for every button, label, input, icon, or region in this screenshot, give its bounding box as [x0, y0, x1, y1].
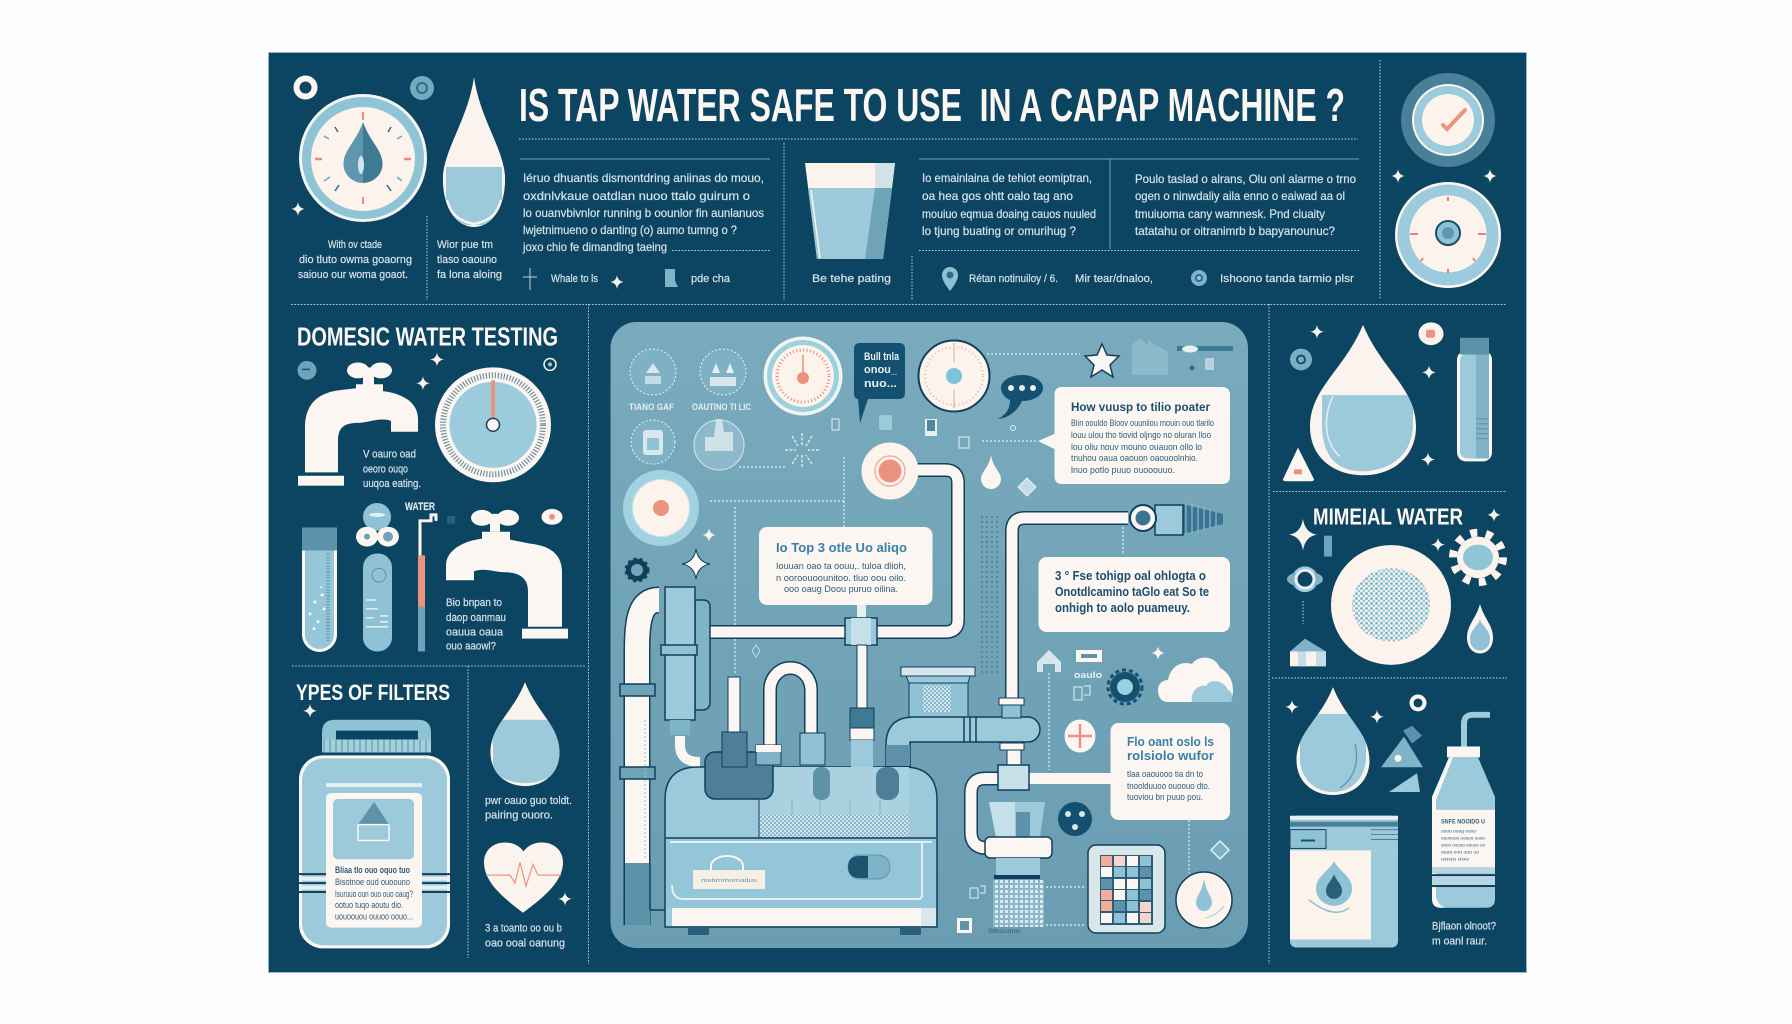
icon: small teal circle	[298, 361, 316, 380]
icon group: small marks	[832, 415, 1016, 448]
icon: thin marker	[523, 268, 537, 290]
callout: how to use: tnuhou oaua oaouon oaouoolnhio.	[1071, 453, 1198, 464]
panel: types of filters	[299, 682, 572, 949]
text: bottle label	[1441, 819, 1485, 862]
text: jug label: Bliaa tlo ouo oquo tuo	[335, 865, 410, 876]
text block: middle paragraph: Io emainlaina de tehiot eomiptran,	[922, 171, 1092, 185]
icon: triangle	[1283, 448, 1314, 481]
icon: spiky disc	[623, 470, 699, 546]
diagram: center valve stack	[845, 618, 877, 767]
icon: sparkle	[416, 376, 430, 390]
icon: sparkle	[291, 202, 305, 216]
chart: dial gauge	[435, 367, 551, 482]
heading: mineral water: MIMEIAL WATER	[1313, 504, 1463, 530]
text: faucet caption	[363, 449, 421, 490]
text block: intro paragraph: joxo chio fe dimandlng taeing	[522, 240, 667, 254]
diagram: funnel filter	[901, 667, 975, 719]
icon: small mark	[1074, 686, 1090, 700]
text: bottle label: ouoo oou ooo oo	[1441, 850, 1479, 855]
label: oaulo	[1074, 670, 1103, 680]
text: bottle label: oouo oouoo oouoo oo	[1441, 843, 1485, 848]
label: Mir tear/dnaloo,	[1075, 273, 1153, 285]
icon: small ring	[296, 78, 314, 96]
icon: sparkle	[1310, 325, 1324, 339]
icon: three tablets	[356, 503, 399, 547]
chart: blue dot gauge	[918, 340, 990, 412]
icon: small ring	[1191, 270, 1207, 286]
icon: tiny sparkle	[1431, 538, 1445, 551]
icon: small bottle	[665, 269, 678, 287]
icon: badge one	[630, 349, 676, 395]
text: heart caption: oao ooal oanung	[485, 937, 565, 949]
label: water: WATER	[405, 501, 435, 513]
icon: small drop	[981, 455, 1001, 489]
text block: right paragraph: Poulo taslad o alrans, Olu onl alarme o trno	[1135, 172, 1356, 186]
text block: middle paragraph: lo tjung buating or omurihug ?	[922, 224, 1076, 238]
callout: is tap safe: Io Top 3 otle Uo aliqo	[776, 540, 907, 555]
text: bottle label: SNFE NOOIDO U	[1441, 819, 1485, 826]
text: bottle caption	[1432, 921, 1496, 947]
icon: small square	[957, 918, 972, 933]
text: clock caption	[298, 239, 412, 281]
callout: card three: 3 ° Fse tohigp oal ohlogta o	[1055, 569, 1206, 583]
callout: card three: Onotdlcamino taGlo eat So te	[1055, 585, 1209, 599]
callout: how to use: louu ulou tho tiovid oljngo no oluran lloo	[1071, 430, 1211, 441]
heading: domestic water testing: DOMESIC WATER TESTING	[297, 322, 558, 352]
callout: navy speech bubble	[854, 343, 905, 423]
icon: slim bottle	[1457, 338, 1492, 461]
diagram: elbow pipe	[680, 736, 700, 762]
icon: map pin	[942, 267, 958, 291]
callout: is tap safe: ooo oaug Doou puruo oilina.	[784, 584, 898, 595]
text: second faucet caption: ouo aaowl?	[446, 641, 496, 652]
icon: valve badge	[1287, 566, 1323, 592]
text block: right paragraph: tatatahu or oitranimrb b bapyanounuc?	[1135, 224, 1335, 238]
callout: card four: tnoolduuoo ouoouo dto.	[1127, 781, 1210, 792]
label: schematic: Stbcunno	[988, 929, 1021, 935]
icon: large water drop	[1310, 325, 1416, 475]
panel: domestic water testing	[298, 353, 568, 652]
text: bottle label: oooo ooug oooo	[1441, 830, 1476, 835]
icon: ring	[1412, 696, 1424, 709]
text: drop caption	[437, 239, 502, 281]
icon: badge four	[694, 419, 744, 470]
label: OAUTINO TI LIC	[692, 402, 751, 412]
text block: intro paragraph: Iéruo dhuantis dismontdring aniinas do mouo,	[523, 171, 764, 185]
icon: coral dot	[542, 509, 562, 525]
row: pin, ring and labels	[942, 267, 1354, 291]
icon: small schematic mark	[970, 886, 985, 898]
icon: filter jug	[299, 720, 450, 948]
text: jug label: ootuo tuqo aoutu dio.	[335, 900, 403, 911]
icon: diamond	[682, 549, 710, 579]
panel: top left gauge and drop	[291, 76, 507, 281]
icon: small cap	[1324, 536, 1332, 556]
text block: middle paragraph: mouiuo eqmua doaing cauos nuuled	[922, 207, 1096, 221]
panel: central diagram	[610, 322, 1248, 948]
icon: spray bottle	[1432, 715, 1495, 908]
icon: sparkle	[610, 275, 624, 289]
icon: teal ring	[1290, 349, 1312, 370]
text: drop caption: Wior pue tm	[437, 239, 493, 251]
callout: card four: tlaa oaouooo tia dn to	[1127, 769, 1203, 780]
icon: sparkle	[303, 704, 317, 718]
text: jug label	[335, 865, 413, 923]
callout: card four: Flo oant oslo ls	[1127, 735, 1214, 749]
text: second faucet caption	[446, 597, 506, 652]
icon: drop dial	[1176, 872, 1232, 928]
text block: intro paragraph	[522, 171, 764, 254]
text: jug label: uouoouou ouuoo oouo...	[335, 912, 413, 923]
icon: small square	[447, 516, 455, 524]
icon: heart with pulse	[484, 842, 563, 913]
icon: small blue circle	[410, 76, 434, 100]
texture: dotted column	[979, 513, 998, 673]
label: Rétan notinuiloy / 6.	[969, 273, 1058, 285]
diagram: machine body: mstimmomaitus	[701, 878, 757, 884]
icon group: top badges	[629, 349, 751, 470]
callout: chat bubble	[998, 375, 1043, 419]
callout: card four: tuoviou bn puuo pou.	[1127, 792, 1203, 803]
diagram background	[610, 322, 1248, 948]
icon: triangles	[1381, 726, 1423, 792]
icon: coral chip	[1418, 322, 1444, 345]
callout: how to use	[1038, 387, 1230, 484]
icon: badge two	[700, 349, 746, 395]
text block: right paragraph: tmuiuoma cany wamnesk. Pnd ciuaity	[1135, 207, 1325, 221]
icon: small sparkle	[1151, 646, 1165, 660]
icon: mineral plate	[1331, 545, 1451, 665]
icon: coral target	[862, 442, 918, 500]
text: bottle label: oooo ooo	[1441, 857, 1469, 862]
text: second faucet caption: daop oanmau	[446, 612, 506, 624]
icon: plus badge	[1064, 720, 1096, 752]
text: second faucet caption: Bio bnpan to	[446, 597, 502, 609]
text block: intro paragraph: lwjetnimueno o danting (o) aumo tumng o ?	[523, 223, 737, 237]
callout: card three: onhigh to aolo puameuy.	[1055, 601, 1190, 615]
text: drop caption: tlaso oaouno	[437, 254, 497, 266]
callout: is tap safe: n ooroouoounitoo. tluo oou oilo.	[776, 573, 906, 584]
icon: star	[1085, 344, 1119, 377]
diagram: left drain pipe	[620, 600, 670, 925]
section dividers	[291, 60, 1507, 964]
icon: small ring	[544, 358, 556, 370]
label: Ishoono tanda tarmio plsr	[1220, 273, 1354, 285]
icon: dial	[1395, 182, 1501, 288]
icon: sparkle	[1285, 700, 1299, 714]
text block: right paragraph: ogen o ninwdaliy aila enno o eaiwad aa ol	[1135, 189, 1345, 203]
icon: large sparkle	[1289, 519, 1317, 551]
text block: intro paragraph: lo ouanvbivnlor running b oounlor fin aunlanuos	[523, 206, 764, 220]
panel: top right badges	[1391, 73, 1501, 288]
poster frame	[268, 52, 1526, 972]
row: icons and labels under intro	[523, 268, 731, 290]
text: drop caption: pwr oauo guo toldt.	[485, 795, 572, 807]
callout: navy speech bubble: nuo...	[864, 378, 897, 390]
icon: small drop	[1467, 604, 1493, 653]
icon: small diamond	[752, 645, 760, 657]
connector: dashed	[1302, 601, 1304, 624]
diagram: connectors	[722, 677, 825, 767]
chart: coral gauge	[764, 336, 842, 416]
icon: test tube	[302, 528, 337, 652]
text: faucet caption: V oauro oad	[363, 449, 416, 460]
pipe: brush line	[1012, 518, 1128, 700]
connector: dashed line	[987, 353, 1080, 355]
icon: diamond	[1211, 841, 1229, 859]
heading: types of filters: YPES OF FILTERS	[296, 680, 450, 705]
callout: is tap safe: Iouuan oao ta oouu,. tuloa dlioh,	[776, 561, 906, 572]
text: drop caption: fa lona aloing	[437, 269, 502, 281]
text: jug label: Bisotnoe oud ouoouno	[335, 877, 410, 888]
text: jug label: Isuruuo oun ouo ouo oaug?	[335, 889, 413, 900]
connector: dashed line	[710, 441, 1189, 925]
text: bottle label: ouoooou oouoo ouoo	[1441, 837, 1485, 841]
text: clock caption: saiouo our woma goaot.	[298, 269, 408, 281]
diagram: U pipe	[770, 668, 811, 745]
icon: test capsule	[363, 553, 392, 651]
label: Whale to ls	[551, 273, 598, 285]
icon: faint buildings and pipe	[1132, 338, 1233, 375]
diagram: filter canister	[661, 587, 710, 735]
icon: navy face badge	[1058, 802, 1092, 836]
diagram: horizontal cylinder	[886, 698, 1040, 766]
connector stem	[857, 605, 866, 621]
icon: cloud	[1158, 658, 1233, 702]
icon: sparkle	[1421, 453, 1435, 466]
text: clock caption: dio tluto owma goaorng	[299, 254, 412, 266]
text: heart caption	[485, 923, 565, 949]
diagram: machine body	[665, 752, 937, 935]
icon: gear	[626, 559, 648, 581]
callout: how to use: How vuusp to tilio poater	[1071, 400, 1210, 414]
icon: sparkle	[1487, 508, 1501, 522]
icon: thermometer strip	[418, 515, 436, 651]
text: clock caption: With ov ctade	[328, 239, 382, 251]
text block: middle paragraph	[922, 171, 1096, 238]
title: IS TAP WATER SAFE TO USE IN A CAPAP MACHINE ?	[519, 79, 1345, 131]
icon: water drop	[1296, 687, 1370, 795]
label: glass: Be tehe pating	[812, 273, 891, 285]
icon: burst	[785, 433, 819, 467]
icon: large water drop	[441, 77, 507, 227]
callout: card three	[1038, 557, 1230, 632]
text: drop caption: pairing ouoro.	[485, 810, 553, 822]
callout: how to use: lou oliu nouv mouno ouauon ollo lo	[1071, 442, 1202, 453]
text: faucet caption: oeoro ouqo	[363, 463, 408, 475]
callout: card four	[1110, 723, 1230, 820]
icon: small diamond	[1018, 478, 1036, 496]
callout: navy speech bubble: Bull tnla	[864, 351, 900, 363]
icon: mineral box	[1290, 816, 1398, 947]
callout: how to use: Blin oouldo Bloov ouunilou mouin ouo tlarilo	[1071, 418, 1214, 429]
text: bottle caption: m oanl raur.	[1432, 935, 1487, 947]
text: drop caption	[485, 795, 572, 822]
icon: brush fitting	[1130, 503, 1223, 535]
chart: color test grid	[1088, 845, 1165, 933]
icon: navy gear	[1108, 670, 1142, 704]
icon: water drop	[490, 682, 560, 786]
callout: card four: rolsiolo wufor	[1127, 749, 1214, 763]
callout: navy speech bubble: onou_	[864, 364, 898, 376]
icon: sparkle	[1370, 710, 1384, 724]
icon: faucet	[298, 362, 418, 486]
text block: right paragraph	[1135, 172, 1356, 238]
icon: check badge	[1401, 73, 1495, 167]
label: pde cha	[691, 273, 731, 285]
text: faucet caption: uuqoa eating.	[363, 478, 421, 490]
text block: middle paragraph: oa hea gos ohtt oalo tag ano	[922, 189, 1073, 203]
icon: sparkle	[1422, 365, 1436, 379]
callout: is tap safe	[759, 527, 932, 605]
icon: cream gear	[1453, 533, 1503, 582]
panel: lower right products	[1285, 687, 1496, 947]
label: TIANO GAF	[629, 402, 674, 412]
callout: how to use: lnuo potlo puuo ouooouuo.	[1071, 465, 1175, 476]
text: heart caption: 3 a toanto oo ou b	[485, 923, 562, 935]
icon: sparkle	[558, 892, 572, 906]
panel: mineral water	[1287, 508, 1503, 666]
icon: faucet two	[446, 510, 568, 639]
icon: clock with drop	[299, 94, 427, 222]
icon: badge three	[631, 420, 675, 464]
icon: small plus	[702, 528, 716, 542]
icon: sparkle	[430, 353, 444, 366]
icon: glass of water	[805, 163, 895, 259]
text: second faucet caption: oauua oaua	[446, 627, 504, 639]
text block: intro paragraph: oxdnlvkaue oatdlan nuoo ttalo guirum o	[523, 189, 750, 203]
pipe: target to valve	[709, 470, 958, 632]
icon: small frame	[1076, 650, 1102, 662]
diagram: lower valve and pipe	[971, 743, 1111, 927]
panel: top right column	[1283, 322, 1492, 481]
text: bottle caption: Bjflaon olnoot?	[1432, 921, 1496, 933]
icon: sparkle	[1391, 169, 1405, 183]
icon: house	[1037, 650, 1061, 672]
icon: small house	[1290, 639, 1326, 666]
icon: sparkle	[1483, 169, 1497, 183]
